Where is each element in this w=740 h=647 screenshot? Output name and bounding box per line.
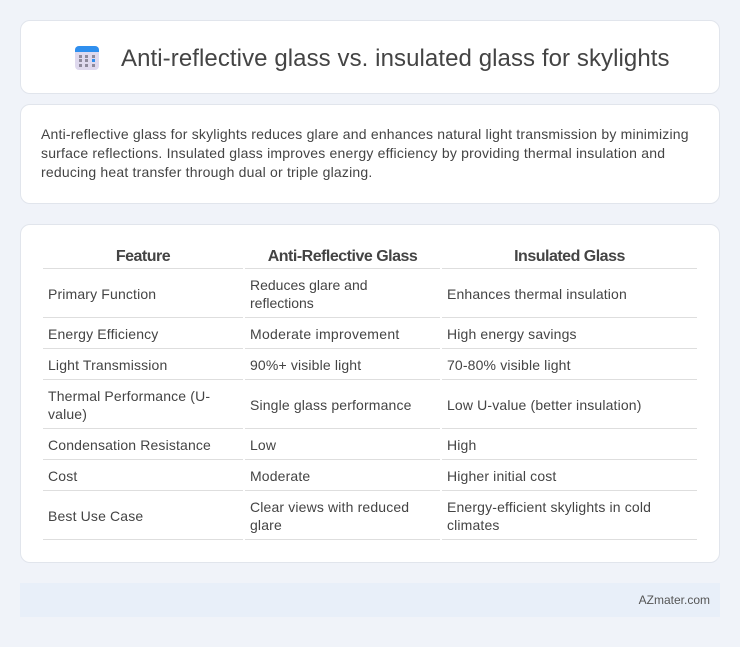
panel: title card — [20, 20, 720, 94]
panel: comparison table — [20, 224, 720, 563]
table row: primary function: reflections — [250, 295, 314, 311]
table row: best use case: Best Use Case — [48, 508, 143, 524]
table row: thermal performance: Single glass performance — [250, 397, 412, 413]
table row: best use case — [48, 499, 651, 533]
table row: light transmission — [48, 357, 571, 373]
panel: intro text — [20, 104, 720, 204]
table row: primary function — [48, 277, 627, 311]
table header — [116, 248, 625, 265]
table row: cost — [48, 468, 556, 484]
table row: energy efficiency — [48, 326, 577, 342]
table row: cost: Higher initial cost — [447, 468, 556, 484]
table header: Feature — [116, 248, 170, 265]
table row: light transmission: 70-80% visible light — [447, 357, 571, 373]
table row: thermal performance: Thermal Performance (U- — [48, 388, 210, 404]
table row: cost: Moderate — [250, 468, 310, 484]
table row: primary function: Primary Function — [48, 286, 156, 302]
table row: energy efficiency: Energy Efficiency — [48, 326, 158, 342]
title: Anti-reflective glass vs. insulated glass for skylights — [121, 45, 670, 72]
intro text: Anti-reflective glass for skylights reduces glare and enhances natural light transmission by minimizing — [41, 126, 689, 142]
table row: best use case: climates — [447, 517, 500, 533]
table row: condensation resistance: High — [447, 437, 476, 453]
table row: thermal performance: Low U-value (better insulation) — [447, 397, 642, 413]
footer bar — [20, 583, 720, 617]
table row: light transmission: 90%+ visible light — [250, 357, 361, 373]
table header: Anti-Reflective Glass — [268, 248, 417, 265]
table row: best use case: Energy-efficient skylights in cold — [447, 499, 651, 515]
table row: primary function: Enhances thermal insulation — [447, 286, 627, 302]
intro text: surface reflections. Insulated glass improves energy efficiency by providing thermal insulation and — [41, 145, 665, 161]
icon: calendar — [75, 46, 99, 70]
table row: primary function: Reduces glare and — [250, 277, 368, 293]
table row: thermal performance — [48, 388, 642, 422]
table row: cost: Cost — [48, 468, 77, 484]
table row: best use case: glare — [250, 517, 282, 533]
intro text — [41, 126, 689, 180]
table row: light transmission: Light Transmission — [48, 357, 167, 373]
table row: best use case: Clear views with reduced — [250, 499, 409, 515]
table row: condensation resistance: Low — [250, 437, 276, 453]
table row: condensation resistance: Condensation Resistance — [48, 437, 211, 453]
table row: thermal performance: value) — [48, 406, 87, 422]
intro text: reducing heat transfer through dual or triple glazing. — [41, 164, 372, 180]
table header: Insulated Glass — [514, 248, 625, 265]
table row: energy efficiency: High energy savings — [447, 326, 577, 342]
table row: condensation resistance — [48, 437, 476, 453]
table row: energy efficiency: Moderate improvement — [250, 326, 400, 342]
footer text: AZmater.com — [639, 593, 710, 607]
